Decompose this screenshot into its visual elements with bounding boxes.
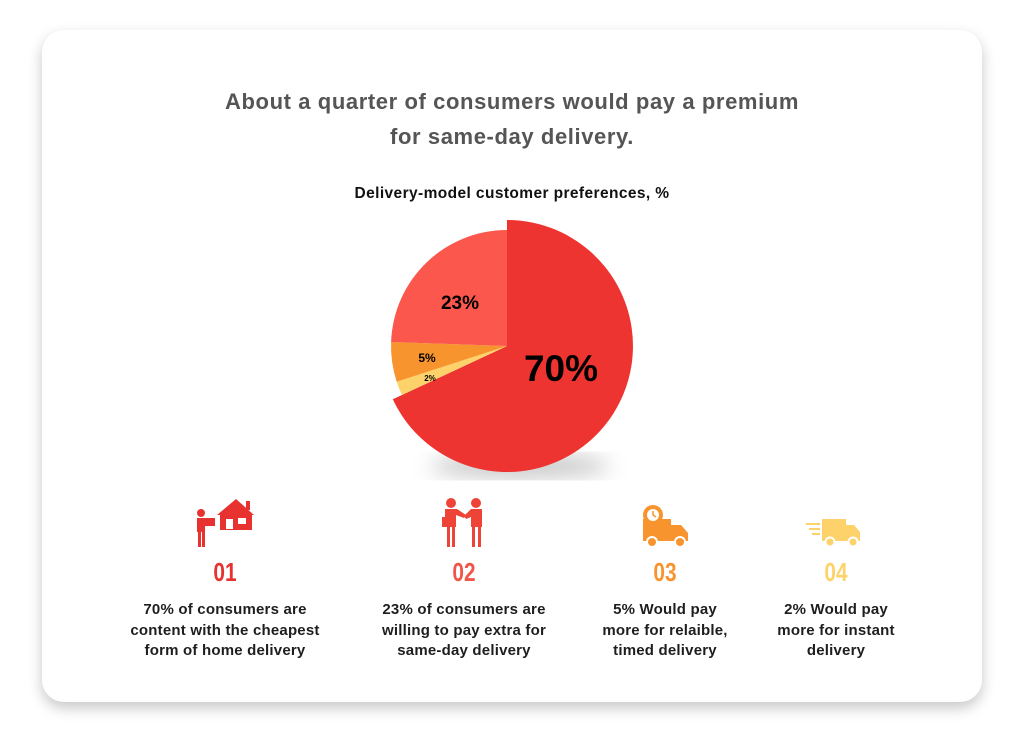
number 04: 04 [824,557,848,587]
pie chart: 23% [441,293,479,314]
icon: handover [442,498,482,547]
text 01 [130,601,320,659]
chart subtitle: Delivery-model customer preferences, % [354,185,670,202]
text 02: willing to pay extra for [382,622,546,638]
text 02 [382,601,546,659]
icon: courier at house [197,499,254,547]
text 03: timed delivery [613,642,717,659]
pie chart: 70% [524,348,598,389]
pie chart: 2% [424,374,436,383]
text 03: more for relaible, [602,622,728,638]
text 04: more for instant [777,622,895,638]
number 02: 02 [452,557,476,587]
text 04: delivery [807,642,865,659]
title [225,89,799,149]
number 01: 01 [213,557,237,587]
title: About a quarter of consumers would pay a premium [225,89,799,114]
title: for same-day delivery. [390,124,634,149]
pie chart: 5% [418,351,436,365]
text 02: same-day delivery [397,642,531,659]
text 03: 5% Would pay [613,601,717,618]
icon: fast truck [806,519,860,546]
text 01: form of home delivery [145,642,305,659]
text 01: content with the cheapest [130,622,320,638]
icon: timed delivery truck [643,505,688,546]
text 04 [777,601,895,659]
text 03 [602,601,728,659]
text 01: 70% of consumers are [143,601,307,618]
text 04: 2% Would pay [784,601,888,618]
number 03: 03 [653,557,677,587]
text 02: 23% of consumers are [382,601,546,618]
